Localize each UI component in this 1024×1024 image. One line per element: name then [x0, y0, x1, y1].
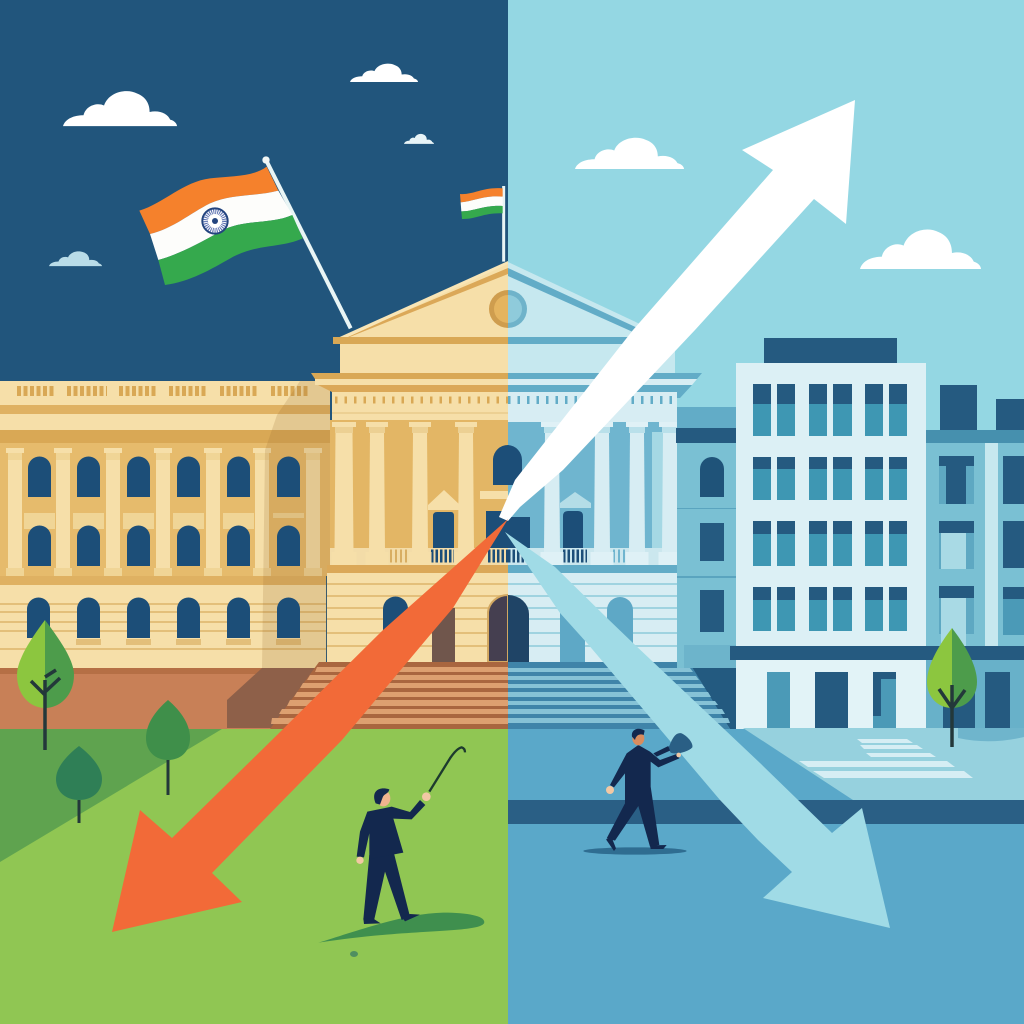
hands: [606, 786, 614, 794]
medallion right half: [508, 290, 527, 328]
cloud: right centre: [575, 138, 684, 169]
tree: right: [927, 628, 977, 747]
cloud: right: [860, 230, 981, 269]
staircase: left half: [270, 662, 508, 729]
mid-floor panels: [24, 513, 304, 529]
pavement patch: [958, 728, 1024, 741]
tree: small centre: [146, 700, 190, 795]
blue window: [508, 445, 522, 485]
arched openings: [383, 596, 408, 640]
head: [632, 731, 644, 745]
hair: [374, 788, 389, 805]
orange falling arrow: [112, 519, 508, 932]
cloud: small top: [350, 64, 418, 82]
medallion left half: [489, 290, 508, 328]
right small door: [480, 491, 508, 499]
sky: light right half: [508, 0, 1024, 730]
cloud: pale left: [49, 251, 102, 266]
figure: man with cane on lawn: [318, 747, 484, 957]
classical building: left wing in gold: [0, 381, 330, 668]
classical building: centre portico blue half: [508, 262, 702, 663]
ground floor: [736, 660, 926, 730]
legs: [363, 853, 410, 921]
saffron band: [139, 167, 278, 234]
cane: [429, 747, 465, 792]
tree: large left: [17, 620, 74, 750]
cloud: tiny: [404, 134, 434, 144]
pebble: [350, 951, 358, 957]
figure: man with bag on plaza: [583, 729, 692, 855]
pale pavement: [743, 728, 1024, 800]
classical building: centre portico gold half: [311, 261, 508, 663]
plinth top edge: [0, 668, 322, 674]
arched windows: [27, 456, 300, 638]
hands: [422, 792, 431, 801]
blue balcony: [508, 548, 685, 565]
blue small door with pediment: [560, 492, 591, 508]
staircase: right half: [508, 662, 736, 729]
blue pediment: [508, 262, 675, 373]
jacket: [357, 800, 425, 859]
small white: [461, 196, 503, 211]
ground: right blue plaza: [508, 729, 1024, 1024]
small pole: [499, 186, 508, 262]
pale pilaster: [652, 432, 663, 552]
small saffron: [460, 188, 503, 202]
wing columns: [6, 448, 322, 576]
window tops: [753, 384, 907, 600]
plinth shadow: [227, 668, 320, 728]
large Indian flag on pole: [139, 156, 351, 328]
portico columns: [332, 422, 478, 565]
body: [607, 745, 679, 847]
shadow: [318, 913, 484, 943]
pedestrian crossing: [799, 739, 973, 778]
right blue building: [926, 385, 1024, 730]
wing shadow: [262, 381, 330, 668]
blue arched openings: [508, 595, 529, 662]
roof block: [764, 338, 897, 363]
plinth: left brick base: [0, 668, 330, 730]
office windows: [753, 384, 907, 631]
white rising arrow: [499, 100, 855, 521]
dark canopy band: [730, 646, 1024, 660]
sky: dark left half: [0, 0, 508, 730]
small green: [461, 206, 503, 219]
balcony: [330, 548, 508, 565]
white band: [150, 191, 292, 260]
ground: left green lawn: [0, 729, 508, 1024]
dark road band: [508, 800, 1024, 824]
blue cornice: [508, 373, 702, 379]
shadow: [583, 847, 687, 855]
green band: [158, 215, 303, 285]
window behind columns: [493, 445, 508, 485]
pediment: [333, 262, 508, 342]
hair: [632, 729, 645, 740]
cornice: [311, 373, 508, 379]
small Indian flag on pole: [460, 186, 504, 262]
small door with pediment: [428, 490, 460, 510]
tree: dark small: [56, 746, 102, 823]
flag pole: [266, 160, 351, 328]
tall white office building: [736, 338, 926, 730]
middle blue building: [676, 407, 736, 668]
lawn shadow wedge: [0, 729, 222, 862]
cloud: large left: [63, 91, 177, 126]
ashoka chakra: [202, 208, 228, 234]
shoes: [606, 837, 667, 851]
blue columns: [540, 422, 682, 565]
bag: [668, 733, 692, 753]
head: [376, 790, 390, 806]
pale blue falling arrow: [505, 532, 890, 928]
